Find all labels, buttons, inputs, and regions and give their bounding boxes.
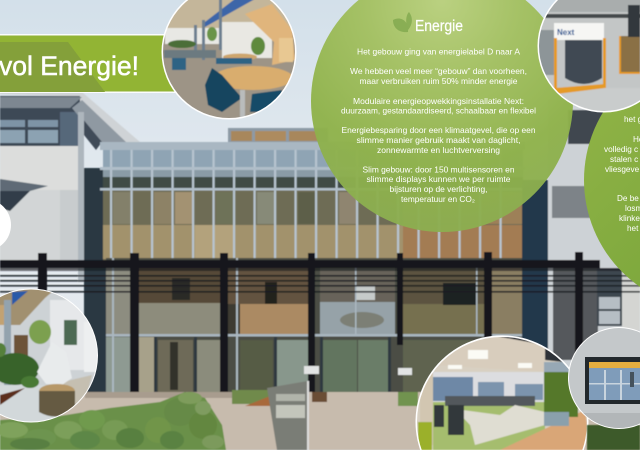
text block: cropped copy: De be [617, 194, 639, 203]
text block: energy facts: maar verbruiken ruim 50% minder energie [360, 77, 518, 86]
text block: energy facts: temperatuur en CO₂ [401, 195, 475, 204]
dark column right [522, 180, 548, 350]
banner title: vol Energie! [0, 51, 139, 81]
right wing [548, 100, 640, 370]
photo circle: cafe interior [160, 0, 300, 120]
text block: energy facts [341, 48, 536, 204]
panel: materials circle (right, cropped) [584, 50, 640, 310]
text block: energy facts: Slim gebouw: door 150 multisensoren en [362, 166, 515, 174]
stone sign [267, 381, 309, 450]
text block: energy facts: slimme displays kunnen we per ruimte [366, 175, 511, 184]
photo circle: wall display [565, 325, 640, 450]
paving [0, 392, 640, 450]
text block: energy facts: duurzaam, gestandaardiseerd, schaalbaar en flexibel [341, 106, 536, 116]
left wing upper windows [0, 96, 126, 150]
Next sign [554, 23, 604, 40]
text block: cropped copy: klinke [619, 214, 640, 223]
photo circle: crystal and plant [0, 285, 100, 425]
text block: cropped copy: stalen c [610, 155, 638, 164]
dark column left [84, 168, 106, 393]
left wing white walls [0, 112, 84, 282]
text block: energy facts: slimme manier gebruik maakt van daglicht, [356, 136, 520, 145]
glass facade ground floor [106, 258, 526, 395]
text block: energy facts: Modulaire energieopwekkingsinstallatie Next: [353, 97, 524, 106]
text block: energy facts: We hebben veel meer “gebouw” dan voorheen, [350, 67, 527, 76]
text block: cropped copy: volledig c [604, 145, 638, 154]
tank [565, 40, 602, 84]
icon: leaf [393, 12, 412, 32]
small white circle left [0, 199, 11, 251]
shrubs [0, 392, 226, 450]
pergola beams and slats [0, 252, 640, 395]
banner: vol Energie! [0, 34, 180, 93]
small unit [620, 36, 640, 74]
photo circle: Next installation [535, 0, 640, 118]
planter and bench [85, 366, 418, 406]
left wing roof wedge [0, 43, 140, 142]
panel: Energie circle [311, 0, 573, 232]
text block: energy facts: bijsturen op de verlichting, [390, 185, 488, 194]
text block: cropped copy: vliesgeve [605, 165, 640, 174]
text block: energy facts: Het gebouw ging van energielabel D naar A [357, 48, 521, 56]
text block: energy facts: Energiebesparing door een klimaatgevel, die op een [342, 126, 536, 135]
text block: cropped copy [604, 115, 640, 233]
heading: Energie: Energie [415, 18, 463, 35]
text block: cropped copy: het [627, 224, 639, 233]
photo circle: Next installation: Next [557, 28, 575, 37]
glass facade upper floors [100, 142, 525, 260]
photo circle: office [414, 335, 590, 450]
upper roof box [228, 128, 328, 143]
text block: energy facts: zonnewarmte en luchtverversing [377, 146, 500, 155]
